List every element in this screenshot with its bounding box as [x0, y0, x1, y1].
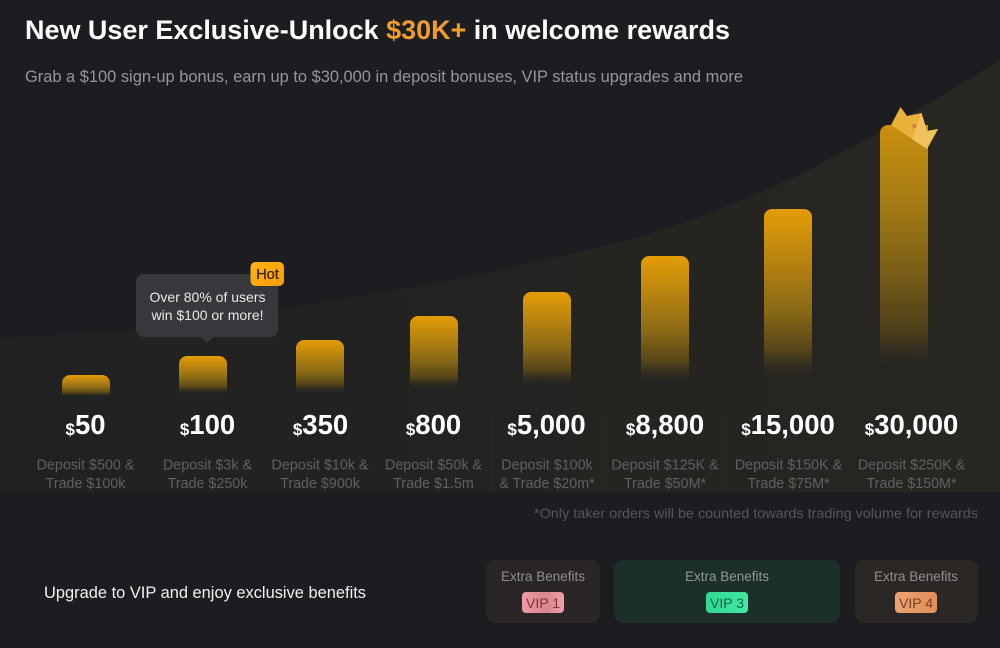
bar: $5,000 — [523, 292, 571, 384]
tooltip — [136, 262, 284, 343]
bar: $100 — [179, 356, 227, 393]
tooltip text: Over 80% of users — [150, 289, 265, 305]
panel: VIP 3 benefits: Extra Benefits — [685, 569, 769, 584]
requirement: $30,000: Deposit $250K & — [858, 458, 966, 474]
requirement: $8,800: Deposit $125K & — [611, 458, 719, 474]
amount: $350: $ — [293, 420, 303, 439]
badge: Hot: Hot — [256, 267, 279, 283]
amount: $100: 100 — [189, 409, 235, 440]
requirement: $100: Trade $250k — [168, 476, 248, 492]
reward amounts — [65, 409, 958, 440]
badge: VIP 4: VIP 4 — [899, 595, 933, 611]
requirement: $5,000: & Trade $20m* — [499, 476, 595, 492]
amount: $30,000: $ — [865, 420, 875, 439]
requirement: $350: Trade $900k — [280, 476, 361, 492]
amount: $100: $ — [180, 420, 190, 439]
amount: $800: 800 — [415, 409, 461, 440]
reward requirements — [37, 458, 966, 492]
tooltip text: win $100 or more! — [150, 307, 264, 323]
bar: $30,000 — [880, 125, 928, 363]
amount: $50: $ — [65, 420, 75, 439]
requirement: $8,800: Trade $50M* — [624, 476, 706, 492]
requirement: $100: Deposit $3k & — [163, 458, 252, 474]
amount: $30,000: 30,000 — [874, 409, 958, 440]
badge: VIP 3: VIP 3 — [710, 595, 744, 611]
requirement: $15,000: Deposit $150K & — [735, 458, 843, 474]
requirement: $30,000: Trade $150M* — [866, 476, 957, 492]
amount: $15,000: $ — [741, 420, 751, 439]
amount: $800: $ — [406, 420, 416, 439]
requirement: $5,000: Deposit $100k — [501, 458, 594, 474]
amount: $5,000: 5,000 — [517, 409, 586, 440]
background rising curve area — [0, 60, 1000, 492]
requirement: $800: Trade $1.5m — [393, 476, 474, 492]
VIP upgrade heading: Upgrade to VIP and enjoy exclusive benefits — [44, 584, 366, 602]
badge: VIP 3 — [706, 592, 748, 613]
panel: VIP 4 benefits — [855, 560, 978, 623]
bar: $350 — [296, 340, 344, 392]
panel: VIP 1 benefits — [486, 560, 600, 623]
footnote: *Only taker orders will be counted towards trading volume for rewards — [534, 505, 978, 521]
amount: $350: 350 — [302, 409, 348, 440]
requirement: $350: Deposit $10k & — [272, 458, 369, 474]
icon: crown — [891, 107, 938, 149]
title: New User Exclusive-Unlock $30K+ in welcome rewards — [25, 15, 730, 45]
bar: $50 — [62, 375, 110, 396]
requirement: $50: Deposit $500 & — [37, 458, 135, 474]
subtitle: Grab a $100 sign-up bonus, earn up to $30,000 in deposit bonuses, VIP status upgrades and more — [25, 68, 743, 86]
panel: VIP 3 benefits — [614, 560, 840, 623]
requirement: $800: Deposit $50k & — [385, 458, 482, 474]
badge: VIP 1: VIP 1 — [526, 595, 560, 611]
bar: $15,000 — [764, 209, 812, 376]
amount: $5,000: $ — [507, 420, 517, 439]
amount: $8,800: $ — [626, 420, 636, 439]
amount: $15,000: 15,000 — [751, 409, 835, 440]
badge: Hot — [250, 262, 284, 286]
requirement: $50: Trade $100k — [46, 476, 126, 492]
amount: $8,800: 8,800 — [635, 409, 704, 440]
bar: $8,800 — [641, 256, 689, 381]
panel: VIP 1 benefits: Extra Benefits — [501, 569, 585, 584]
requirement: $15,000: Trade $75M* — [747, 476, 830, 492]
panel: VIP 4 benefits: Extra Benefits — [874, 569, 958, 584]
amount: $50: 50 — [75, 409, 106, 440]
bar: $800 — [410, 316, 458, 388]
bar chart: reward tiers — [62, 125, 928, 396]
